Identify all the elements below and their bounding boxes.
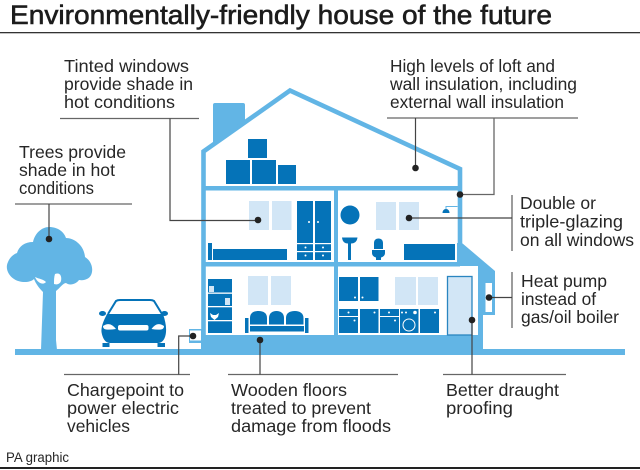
label: draught proofing: Better draught bbox=[446, 380, 559, 400]
title: Environmentally-friendly house of the future bbox=[10, 0, 552, 30]
label: tinted windows: provide shade in bbox=[64, 74, 193, 94]
living room window bbox=[248, 276, 291, 305]
bathroom mirror bbox=[340, 206, 360, 224]
label: draught proofing: proofing bbox=[446, 398, 513, 418]
bath bbox=[404, 244, 455, 260]
label: heat pump: Heat pump bbox=[521, 271, 607, 291]
door bbox=[448, 276, 472, 335]
credit: PA graphic bbox=[6, 450, 69, 465]
label: heat pump: gas/oil boiler bbox=[521, 307, 619, 327]
heat pump unit bbox=[483, 279, 495, 315]
label: trees: shade in hot bbox=[19, 160, 115, 180]
label: tinted windows: hot conditions bbox=[64, 92, 175, 112]
kitchen window bbox=[395, 277, 438, 305]
label: heat pump: instead of bbox=[521, 289, 596, 309]
label: wooden floors bbox=[228, 337, 398, 436]
label: insulation bbox=[387, 56, 578, 198]
bed bbox=[208, 243, 287, 260]
label: insulation: wall insulation, including bbox=[389, 74, 577, 94]
label: heat pump bbox=[486, 271, 619, 328]
label: chargepoint: power electric bbox=[67, 398, 179, 418]
extension roof and wall bbox=[457, 243, 495, 350]
label: trees: conditions bbox=[19, 178, 94, 198]
car bbox=[99, 300, 168, 347]
boxes in loft bbox=[226, 139, 296, 184]
label: tinted windows: Tinted windows bbox=[64, 56, 189, 76]
toilet bbox=[372, 238, 385, 260]
label: chargepoint bbox=[64, 333, 196, 436]
chargepoint bbox=[189, 329, 202, 349]
label: trees: Trees provide bbox=[19, 142, 126, 162]
label: glazing bbox=[406, 193, 634, 251]
kitchen base units bbox=[339, 309, 439, 333]
sink bbox=[342, 238, 358, 260]
label: chargepoint: vehicles bbox=[67, 416, 130, 436]
label: tinted windows bbox=[60, 56, 261, 223]
floors and walls bbox=[203, 186, 460, 336]
label: wooden floors: damage from floods bbox=[231, 416, 391, 436]
shower bbox=[442, 206, 458, 213]
wardrobe bbox=[297, 201, 331, 260]
chimney bbox=[213, 103, 245, 143]
bathroom window bbox=[376, 202, 419, 230]
tree bbox=[7, 227, 92, 350]
label: glazing: triple-glazing bbox=[520, 212, 623, 232]
label: draught proofing bbox=[443, 317, 566, 418]
house shell bbox=[204, 90, 460, 335]
label: glazing: Double or bbox=[520, 193, 596, 213]
label: wooden floors: Wooden floors bbox=[231, 380, 347, 400]
label: trees bbox=[15, 142, 132, 242]
label: chargepoint: Chargepoint to bbox=[67, 380, 184, 400]
label: insulation: external wall insulation bbox=[390, 92, 564, 112]
floor slab and ground bbox=[15, 335, 625, 355]
house bbox=[15, 90, 625, 355]
kitchen wall cupboards bbox=[339, 277, 378, 301]
bookshelf bbox=[208, 279, 232, 333]
label: wooden floors: treated to prevent bbox=[231, 398, 371, 418]
bedroom window bbox=[249, 201, 292, 230]
label: glazing: on all windows bbox=[520, 230, 634, 250]
label: insulation: High levels of loft and bbox=[390, 56, 555, 76]
sofa bbox=[245, 311, 308, 333]
